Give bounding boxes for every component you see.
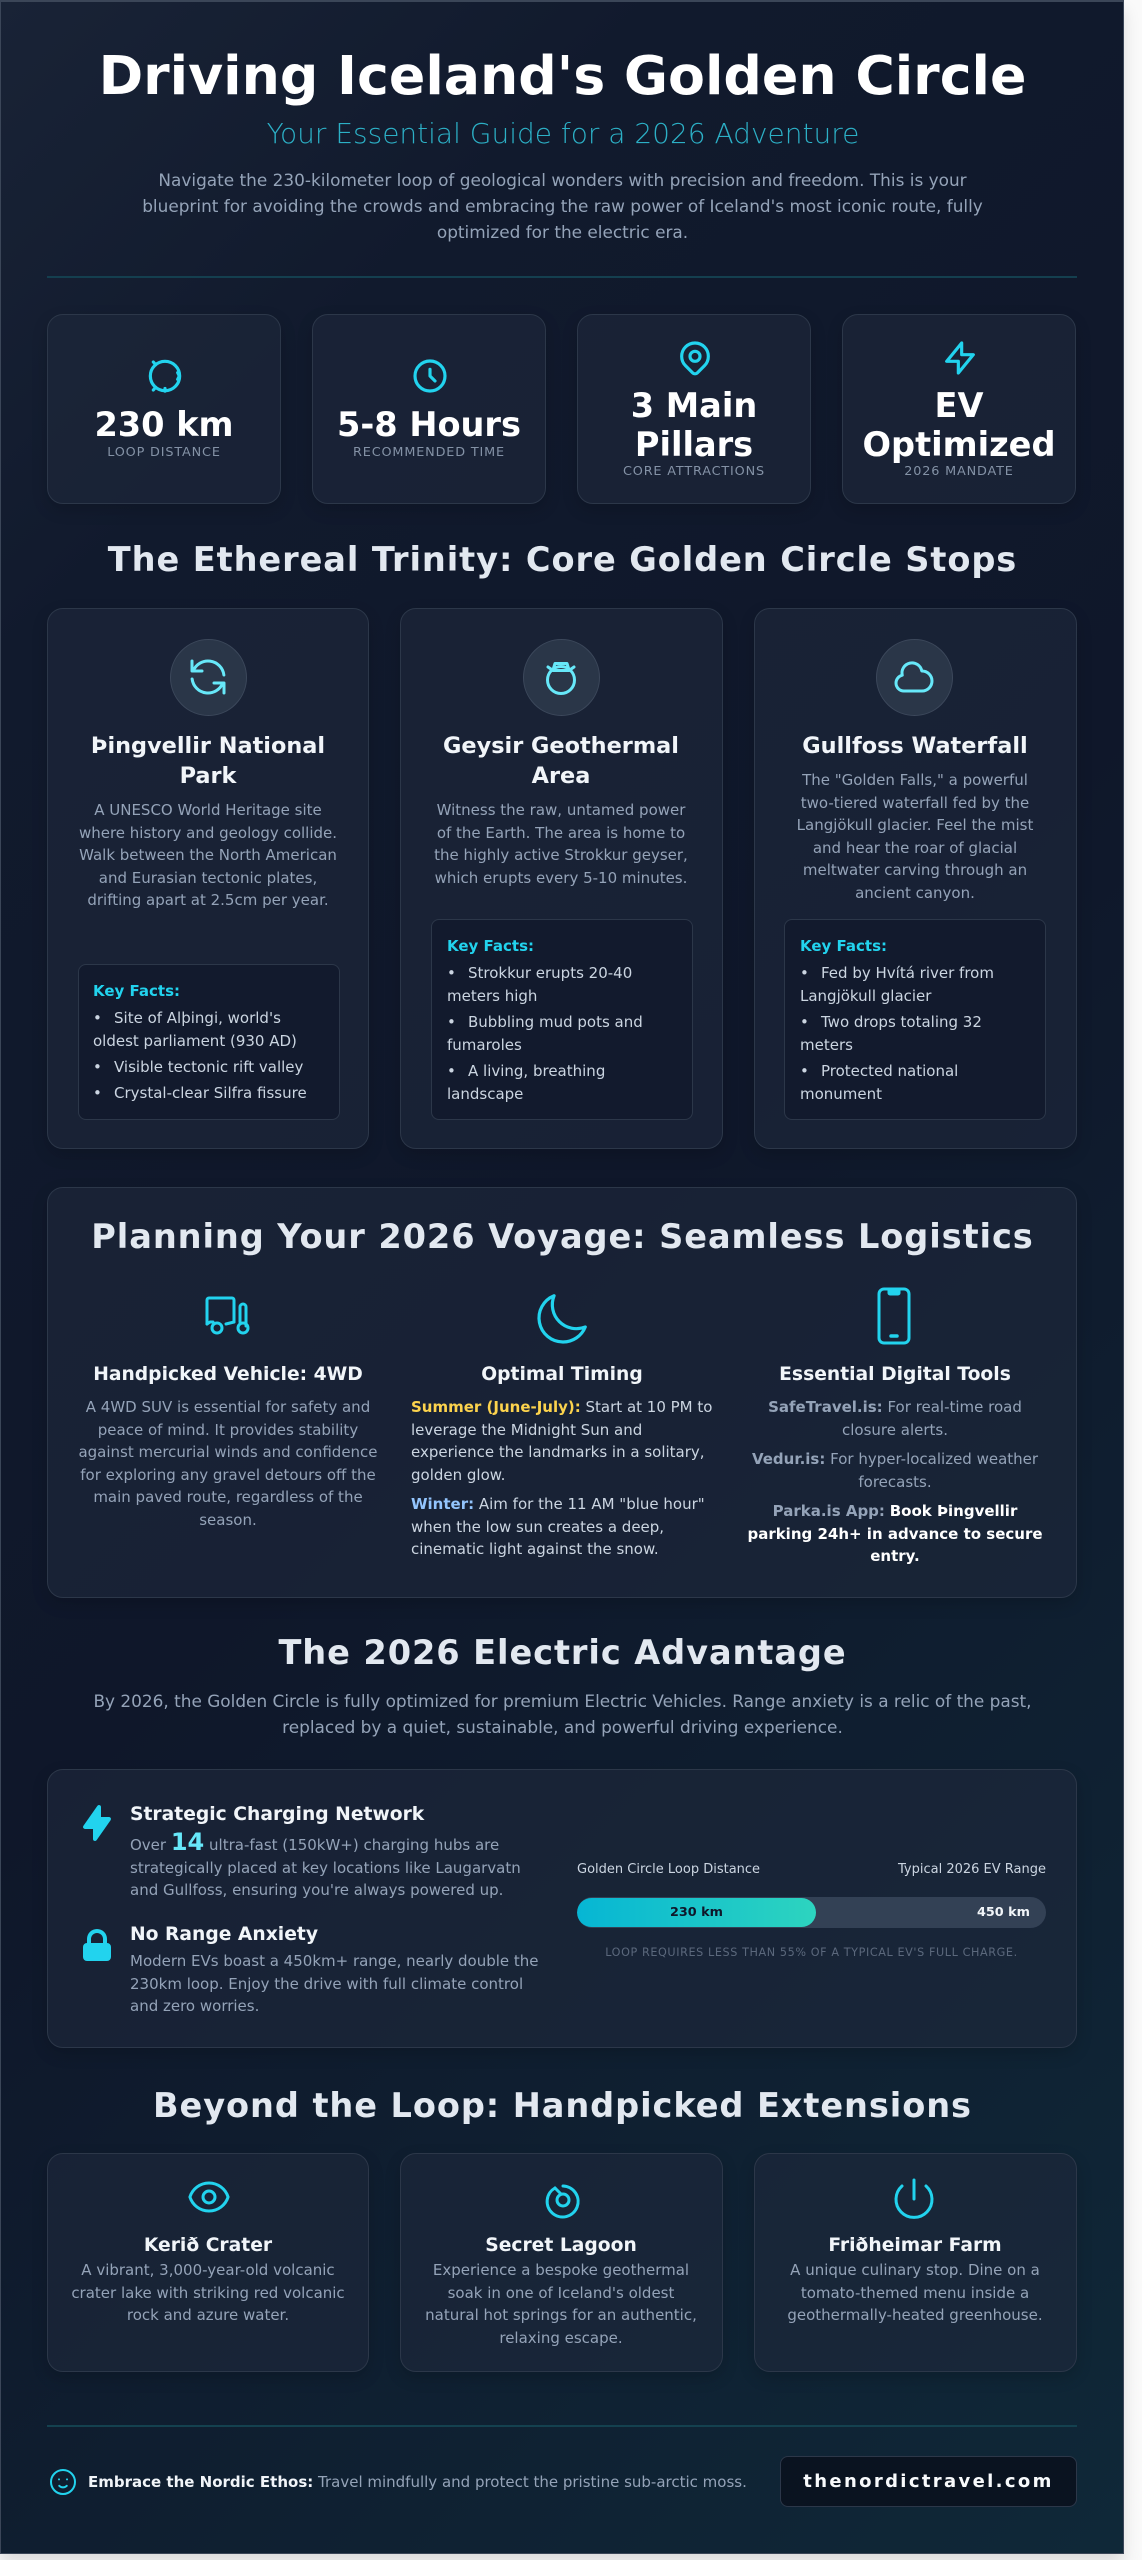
key facts: • bbox=[800, 964, 809, 982]
description: A UNESCO World Heritage site bbox=[94, 801, 322, 819]
intro paragraph: blueprint for avoiding the crowds and embracing the raw power of Iceland's most iconic route, fully bbox=[142, 196, 983, 216]
text: parka: entry. bbox=[870, 1547, 920, 1565]
description bbox=[434, 801, 688, 886]
text: summer: leverage the Midnight Sun and bbox=[411, 1420, 642, 1438]
icon: phone bbox=[878, 1288, 910, 1344]
key facts: oldest parliament (930 AD) bbox=[93, 1032, 297, 1050]
description bbox=[797, 771, 1033, 902]
feature title: No Range Anxiety bbox=[130, 1924, 318, 1945]
feature text: strategically placed at key locations like Laugarvatn bbox=[130, 1858, 521, 1876]
icon: clock bbox=[413, 359, 447, 393]
card title: Area bbox=[532, 763, 590, 789]
description bbox=[425, 2261, 697, 2346]
icon: power bbox=[894, 2178, 934, 2219]
key facts: Two drops totaling 32 bbox=[821, 1013, 982, 1031]
feature text: 230km loop. Enjoy the drive with full climate control bbox=[130, 1974, 523, 1992]
description: the highly active Strokkur geyser, bbox=[434, 846, 688, 864]
description: relaxing escape. bbox=[499, 2328, 623, 2346]
key facts: meters bbox=[800, 1036, 853, 1054]
feature text bbox=[130, 1952, 539, 2015]
key facts: • bbox=[93, 1058, 102, 1076]
key facts: Key Facts: bbox=[800, 937, 887, 955]
icon: smile bbox=[47, 2466, 79, 2498]
icon: eye bbox=[188, 2182, 230, 2212]
key facts: • bbox=[447, 964, 456, 982]
description: A unique culinary stop. Dine on a bbox=[790, 2261, 1040, 2279]
icon: lagoon swirl bbox=[546, 2184, 580, 2218]
panel: Gullfoss bbox=[754, 608, 1077, 1149]
text: vedur: Vedur.is: For hyper-localized weather bbox=[752, 1450, 1038, 1468]
column title: Handpicked Vehicle: 4WD bbox=[93, 1364, 363, 1385]
key facts: Site of Alþingi, world's bbox=[114, 1009, 281, 1027]
description: and Eurasian tectonic plates, bbox=[99, 868, 317, 886]
description: ancient canyon. bbox=[855, 884, 975, 902]
value: 230 km bbox=[94, 405, 234, 444]
description: Walk between the North American bbox=[79, 846, 337, 864]
label: LOOP DISTANCE bbox=[107, 445, 221, 460]
intro paragraph bbox=[142, 170, 983, 242]
intro paragraph: Navigate the 230-kilometer loop of geological wonders with precision and freedom. This is your bbox=[158, 170, 967, 190]
key facts: Bubbling mud pots and bbox=[468, 1013, 643, 1031]
description: Witness the raw, untamed power bbox=[437, 801, 685, 819]
card title: Park bbox=[180, 763, 236, 789]
text: safetravel: closure alerts. bbox=[842, 1420, 948, 1438]
title: Driving Iceland's Golden Circle bbox=[99, 44, 1026, 107]
text bbox=[78, 1398, 378, 1528]
key facts: Protected national bbox=[821, 1062, 958, 1080]
text: safetravel: SafeTravel.is: For real-time road bbox=[768, 1398, 1022, 1416]
card title: Gullfoss Waterfall bbox=[802, 733, 1028, 759]
text: A 4WD SUV is essential for safety and bbox=[86, 1398, 370, 1416]
icon: loop bbox=[148, 360, 182, 393]
icon: solid bolt bbox=[83, 1805, 111, 1841]
card title: Kerið Crater bbox=[144, 2235, 272, 2256]
key facts bbox=[431, 919, 693, 1120]
stat: time bbox=[312, 314, 546, 504]
text: winter: Winter: Aim for the 11 AM "blue hour" bbox=[411, 1495, 705, 1513]
feature text bbox=[130, 1828, 521, 1899]
column title: Essential Digital Tools bbox=[779, 1364, 1011, 1385]
description: two-tiered waterfall fed by the bbox=[801, 794, 1029, 812]
description: soak in one of Iceland's oldest bbox=[448, 2284, 674, 2302]
description: The "Golden Falls," a powerful bbox=[802, 771, 1028, 789]
key facts: Langjökull glacier bbox=[800, 986, 931, 1004]
bar value: 450 km: 450 km bbox=[977, 1905, 1030, 1920]
feature: no range anxiety bbox=[83, 1924, 539, 2015]
feature title: Strategic Charging Network bbox=[130, 1804, 424, 1825]
panel: Thingvellir bbox=[47, 608, 369, 1149]
key facts: • bbox=[447, 1013, 456, 1031]
text: summer bbox=[411, 1398, 712, 1484]
text: for exploring any gravel detours off the bbox=[80, 1466, 376, 1484]
text: winter: cinematic light against the snow. bbox=[411, 1540, 659, 1558]
label: 2026 MANDATE bbox=[904, 464, 1014, 479]
card title bbox=[443, 733, 679, 789]
column title: Optimal Timing bbox=[481, 1364, 643, 1385]
key facts: • bbox=[800, 1013, 809, 1031]
column: vehicle bbox=[78, 1296, 378, 1528]
subtitle: Your Essential Guide for a 2026 Adventure bbox=[267, 117, 859, 150]
icon: tectonic refresh bbox=[170, 639, 247, 716]
key facts: • bbox=[93, 1009, 102, 1027]
panel: Fridheimar bbox=[754, 2153, 1077, 2372]
value: 3 Main bbox=[631, 386, 757, 425]
description: drifting apart at 2.5cm per year. bbox=[87, 891, 329, 909]
card title: Þingvellir National bbox=[91, 733, 325, 759]
card title bbox=[91, 733, 325, 789]
key facts: • bbox=[800, 1062, 809, 1080]
description: Experience a bespoke geothermal bbox=[433, 2261, 689, 2279]
key facts: fumaroles bbox=[447, 1036, 522, 1054]
description bbox=[71, 2261, 345, 2324]
description: which erupts every 5-10 minutes. bbox=[435, 868, 687, 886]
range bar bbox=[577, 1897, 1046, 1928]
panel: Geysir bbox=[400, 608, 723, 1149]
panel: electric bbox=[47, 1769, 1077, 2048]
panel: Secret Lagoon bbox=[400, 2153, 723, 2372]
electric intro: replaced by a quiet, sustainable, and powerful driving experience. bbox=[282, 1717, 843, 1737]
value: EV bbox=[935, 386, 983, 425]
card title: Geysir Geothermal bbox=[443, 733, 679, 759]
icon: cloud bbox=[876, 639, 953, 716]
text: vedur bbox=[752, 1450, 1038, 1490]
label: RECOMMENDED TIME bbox=[353, 445, 505, 460]
label: CORE ATTRACTIONS bbox=[623, 464, 765, 479]
key facts bbox=[78, 964, 340, 1120]
panel: stat cards bbox=[47, 314, 1076, 504]
header: title and intro bbox=[99, 44, 1026, 242]
heading: electric: The 2026 Electric Advantage bbox=[278, 1633, 847, 1672]
electric intro: By 2026, the Golden Circle is fully optimized for premium Electric Vehicles. Range anxiety is a relic of the past, bbox=[93, 1691, 1032, 1711]
value bbox=[862, 386, 1056, 464]
key facts: landscape bbox=[447, 1084, 523, 1102]
text: summer: Summer (June-July): Start at 10 PM to bbox=[411, 1398, 712, 1416]
description: tomato-themed menu inside a bbox=[801, 2284, 1029, 2302]
description: where history and geology collide. bbox=[79, 824, 337, 842]
card title: Secret Lagoon bbox=[485, 2235, 637, 2256]
icon: bolt outline bbox=[945, 341, 975, 375]
key facts: A living, breathing bbox=[468, 1062, 605, 1080]
description: geothermally-heated greenhouse. bbox=[787, 2306, 1043, 2324]
text: safetravel bbox=[768, 1398, 1022, 1438]
text: season. bbox=[199, 1510, 257, 1528]
value: Pillars bbox=[635, 424, 753, 464]
stat: loop distance bbox=[47, 314, 281, 504]
value bbox=[631, 386, 757, 464]
value: Optimized bbox=[862, 424, 1056, 464]
icon: pin bbox=[680, 341, 710, 376]
text: winter: when the low sun creates a deep, bbox=[411, 1518, 664, 1536]
heading: extensions: Beyond the Loop: Handpicked Extensions bbox=[153, 2086, 972, 2125]
icon: lock bbox=[83, 1929, 111, 1961]
text: main paved route, regardless of the bbox=[93, 1488, 363, 1506]
description: and hear the roar of glacial bbox=[813, 838, 1017, 856]
description: crater lake with striking red volcanic bbox=[71, 2284, 345, 2302]
key facts: Strokkur erupts 20-40 bbox=[468, 964, 632, 982]
description: meltwater carving through an bbox=[803, 861, 1027, 879]
stat: pillars bbox=[577, 314, 811, 504]
bar fill: 230 km bbox=[577, 1898, 816, 1927]
chart label: loop: Golden Circle Loop Distance bbox=[577, 1862, 760, 1877]
key facts: monument bbox=[800, 1084, 882, 1102]
text: summer: experience the landmarks in a solitary, bbox=[411, 1443, 705, 1461]
panel: logistics bbox=[47, 1187, 1077, 1598]
description: Langjökull glacier. Feel the mist bbox=[797, 816, 1033, 834]
description: of the Earth. The area is home to bbox=[437, 824, 685, 842]
value: 5-8 Hours bbox=[337, 405, 521, 444]
text: vedur: forecasts. bbox=[858, 1472, 932, 1490]
icon: moon bbox=[537, 1294, 587, 1344]
chart: range comparison bbox=[577, 1862, 1046, 1959]
text: parka bbox=[747, 1502, 1043, 1565]
description bbox=[787, 2261, 1043, 2324]
brand badge bbox=[780, 2456, 1077, 2507]
key facts: Visible tectonic rift valley bbox=[114, 1058, 303, 1076]
text: peace of mind. It provides stability bbox=[98, 1420, 358, 1438]
key facts: Crystal-clear Silfra fissure bbox=[114, 1084, 307, 1102]
key facts: • bbox=[447, 1062, 456, 1080]
bar fill: 230 km: 230 km bbox=[670, 1905, 723, 1920]
description: A vibrant, 3,000-year-old volcanic bbox=[81, 2261, 335, 2279]
description bbox=[79, 801, 337, 909]
brand badge: thenordictravel.com bbox=[803, 2471, 1054, 2492]
column: digital tools bbox=[747, 1288, 1043, 1565]
panel: Kerid bbox=[47, 2153, 369, 2372]
stat: EV bbox=[842, 314, 1076, 504]
heading: logistics: Planning Your 2026 Voyage: Seamless Logistics bbox=[91, 1217, 1034, 1256]
text: against mercurial winds and confidence bbox=[78, 1443, 378, 1461]
key facts: Key Facts: bbox=[93, 982, 180, 1000]
icon: vehicle bbox=[205, 1296, 250, 1334]
feature text: Over 14 ultra-fast (150kW+) charging hubs are bbox=[130, 1828, 499, 1856]
key facts: Fed by Hvítá river from bbox=[821, 964, 994, 982]
chart label: range: Typical 2026 EV Range bbox=[898, 1862, 1046, 1877]
text: summer: golden glow. bbox=[411, 1466, 505, 1484]
key facts: meters high bbox=[447, 986, 537, 1004]
description: rock and azure water. bbox=[127, 2306, 289, 2324]
card title: Friðheimar Farm bbox=[828, 2235, 1002, 2256]
feature text: and zero worries. bbox=[130, 1997, 259, 2015]
key facts: • bbox=[93, 1084, 102, 1102]
icon: geyser bbox=[523, 639, 600, 716]
intro paragraph: optimized for the electric era. bbox=[437, 222, 688, 242]
heading: core stops: The Ethereal Trinity: Core Golden Circle Stops bbox=[108, 540, 1017, 579]
electric intro bbox=[93, 1691, 1032, 1737]
footer message: Embrace the Nordic Ethos: Travel mindfully and protect the pristine sub-arctic moss. bbox=[88, 2473, 747, 2491]
feature: charging network bbox=[83, 1804, 521, 1899]
text: parka: parking 24h+ in advance to secure bbox=[747, 1524, 1043, 1542]
description: natural hot springs for an authentic, bbox=[425, 2306, 697, 2324]
text: parka: Parka.is App: Book Þingvellir bbox=[773, 1502, 1017, 1520]
text: winter bbox=[411, 1495, 705, 1558]
chart note: LOOP REQUIRES LESS THAN 55% OF A TYPICAL EV'S FULL CHARGE. bbox=[605, 1946, 1018, 1959]
feature text: Modern EVs boast a 450km+ range, nearly double the bbox=[130, 1952, 539, 1970]
column: timing bbox=[411, 1294, 712, 1558]
footer bbox=[47, 2452, 1077, 2512]
feature text: and Gullfoss, ensuring you're always powered up. bbox=[130, 1881, 503, 1899]
key facts: Key Facts: bbox=[447, 937, 534, 955]
key facts bbox=[784, 919, 1046, 1120]
